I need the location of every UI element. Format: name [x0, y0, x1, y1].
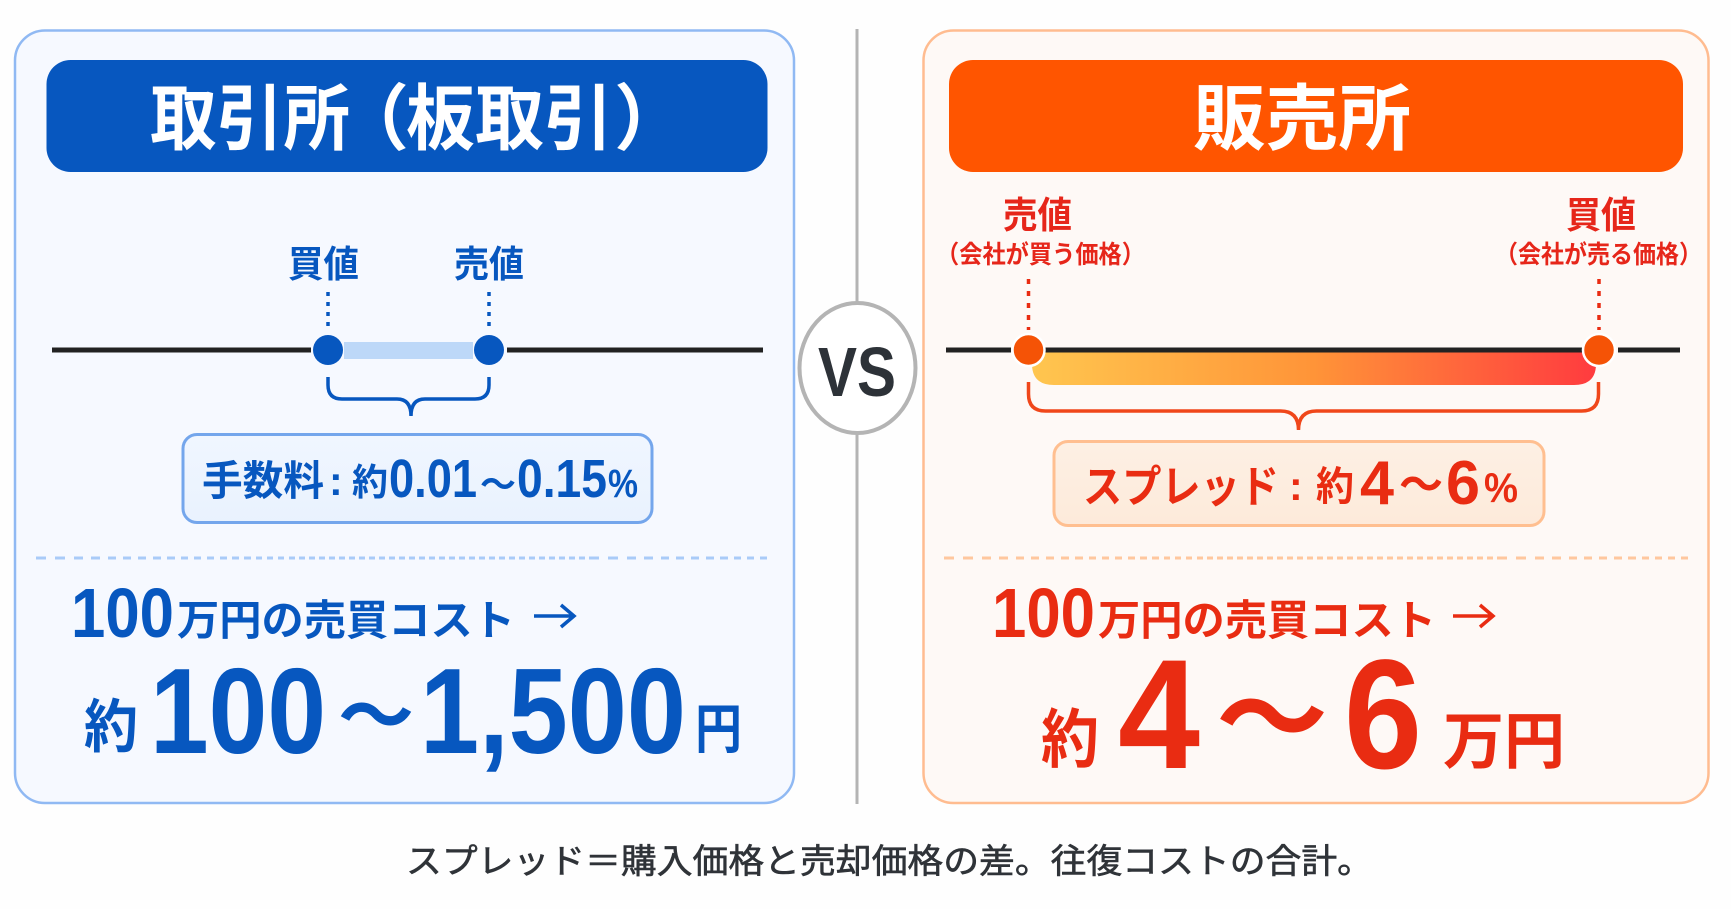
cost value: 約100～1,500円: 100 — [150, 643, 326, 779]
panel: 取引所 — [15, 30, 794, 803]
callout: 手数料: 約 — [352, 462, 388, 503]
cost value: 約100～1,500円: 円 — [695, 700, 742, 760]
callout: 手数料: 0.01 — [389, 449, 477, 509]
callout: スプレッド: 6 — [1446, 449, 1480, 518]
cost value: 約100～1,500円 — [84, 643, 742, 779]
price line chart — [52, 292, 763, 365]
heading bar: 販売所: 販売所 — [1193, 80, 1411, 160]
callout: スプレッド: スプレッド — [1083, 463, 1279, 512]
divider — [36, 556, 771, 560]
callout: 手数料: 手数料 — [202, 458, 324, 504]
callout: スプレッド: 約 — [1316, 465, 1354, 509]
brace — [328, 377, 489, 416]
text: 100万円の売買コスト — [71, 574, 574, 652]
price line chart with spread bar — [946, 279, 1680, 385]
panel background — [924, 30, 1708, 803]
text: 100万円の売買コスト — [992, 574, 1493, 652]
VS badge: VS — [818, 333, 896, 411]
cost value: 約4～6万円: 6 — [1344, 628, 1422, 802]
callout: 手数料: 0.15 — [517, 449, 607, 509]
panel: 販売所 — [924, 30, 1708, 803]
heading bar: 取引所（板取引）: 板取引 — [406, 80, 613, 160]
cost value: 約4～6万円 — [1041, 628, 1565, 802]
callout: スプレッド: % — [1484, 464, 1518, 511]
heading bar: 販売所 — [949, 60, 1683, 172]
label: 買値（会社が売る価格） — [1495, 195, 1702, 269]
cost value: 約4～6万円: ～ — [1216, 657, 1328, 782]
label: 買値（会社が売る価格）: （会社が売る価格） — [1495, 240, 1702, 269]
callout: スプレッド: : — [1289, 463, 1303, 509]
panel background — [15, 30, 794, 803]
cost value: 約100～1,500円: 約 — [84, 695, 138, 760]
callout: スプレッド — [1054, 442, 1544, 526]
divider line — [856, 29, 858, 804]
callout: スプレッド: ～ — [1399, 461, 1443, 510]
text: 100万円の売買コスト: 万円の売買コスト — [1098, 597, 1436, 644]
brace — [1028, 382, 1598, 430]
label: 売値: 売値 — [454, 244, 524, 285]
callout: 手数料: % — [608, 462, 638, 506]
heading bar: 取引所（板取引）: ） — [614, 80, 686, 160]
heading bar: 取引所（板取引） — [46, 60, 768, 172]
text: 100万円の売買コスト: 万円の売買コスト — [177, 597, 515, 644]
label: 売値（会社が買う価格） — [936, 195, 1145, 269]
callout: 手数料 — [183, 434, 652, 522]
VS badge — [800, 303, 916, 433]
label: 買値: 買値 — [288, 244, 359, 285]
cost value: 約4～6万円: 4 — [1118, 628, 1200, 802]
label: 買値（会社が売る価格）: 買値 — [1566, 195, 1636, 236]
label: 売値（会社が買う価格）: （会社が買う価格） — [936, 240, 1145, 269]
callout: スプレッド: 4 — [1360, 449, 1395, 518]
text: 100万円の売買コスト: 100 — [71, 574, 174, 652]
cost value: 約4～6万円: 約 — [1041, 704, 1099, 776]
cost value: 約4～6万円: 万円 — [1443, 708, 1565, 777]
callout: 手数料: : — [329, 458, 343, 504]
text: 100万円の売買コスト: 100 — [992, 574, 1095, 652]
heading bar: 取引所（板取引）: 取引所 — [150, 80, 350, 160]
cost value: 約100～1,500円: ～ — [338, 675, 414, 760]
caption: スプレッド＝購入価格と売却価格の差。往復コストの合計。 — [406, 843, 1373, 881]
heading bar: 取引所（板取引）: （ — [337, 80, 409, 160]
callout: 手数料: ～ — [480, 464, 516, 505]
cost value: 約100～1,500円: 1,500 — [420, 643, 686, 779]
divider — [944, 556, 1688, 560]
label: 売値（会社が買う価格）: 売値 — [1003, 195, 1072, 236]
